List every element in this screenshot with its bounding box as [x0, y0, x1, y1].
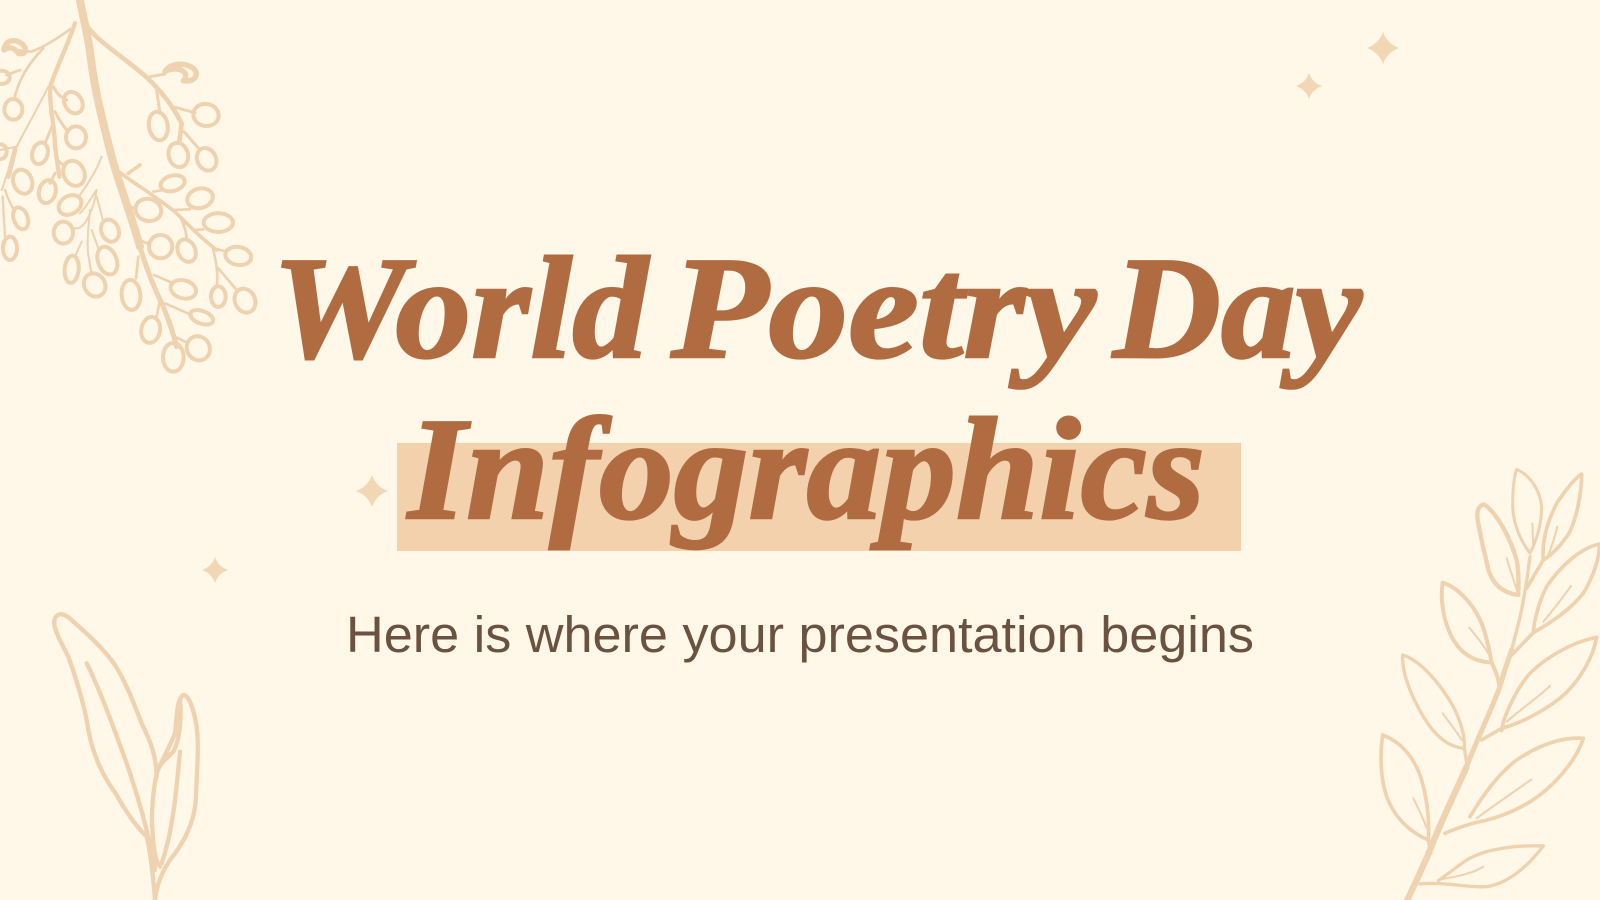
title [272, 227, 1363, 550]
icon: sparkle top right small [1296, 73, 1322, 99]
icon: sparkle left large [356, 475, 388, 507]
title: Poetry [670, 227, 1097, 389]
title: Day [1111, 227, 1363, 389]
subtitle: Here is where your presentation begins [346, 606, 1254, 663]
illustration: leaf branch bottom right [1381, 469, 1599, 900]
title: World [272, 227, 650, 389]
illustration: leaves bottom left [54, 614, 198, 900]
title: Infographics [406, 388, 1205, 550]
icon: sparkle left small [202, 557, 228, 583]
title highlight block [397, 443, 1241, 551]
illustration: budding branch top left [0, 0, 259, 372]
icon: sparkle top right large [1367, 32, 1399, 64]
buds [0, 41, 259, 372]
